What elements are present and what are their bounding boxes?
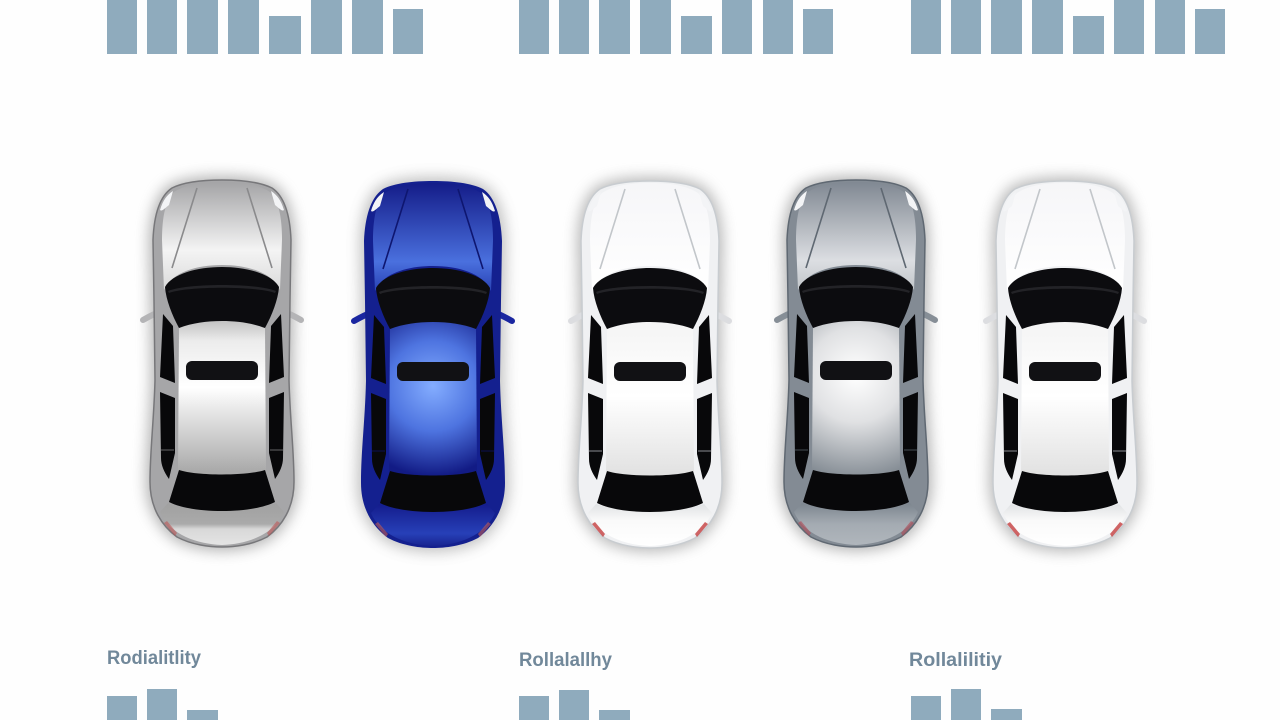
car: white, right (986, 181, 1144, 548)
label: left: Rodialitlity (107, 648, 201, 669)
car: white (571, 181, 729, 548)
bottom bar chart: center (519, 690, 630, 720)
car: blue (354, 181, 512, 548)
label: right: Rollalilitiy (909, 650, 1002, 671)
bottom bar chart: left (107, 689, 218, 720)
top bar chart: right (911, 0, 1225, 54)
bottom bar chart: right (911, 689, 1022, 720)
top bar chart: center (519, 0, 833, 54)
label: center: Rollalallhy (519, 650, 612, 671)
car: grey (777, 180, 935, 547)
top bar chart: left (107, 0, 423, 54)
car: silver (143, 180, 301, 547)
